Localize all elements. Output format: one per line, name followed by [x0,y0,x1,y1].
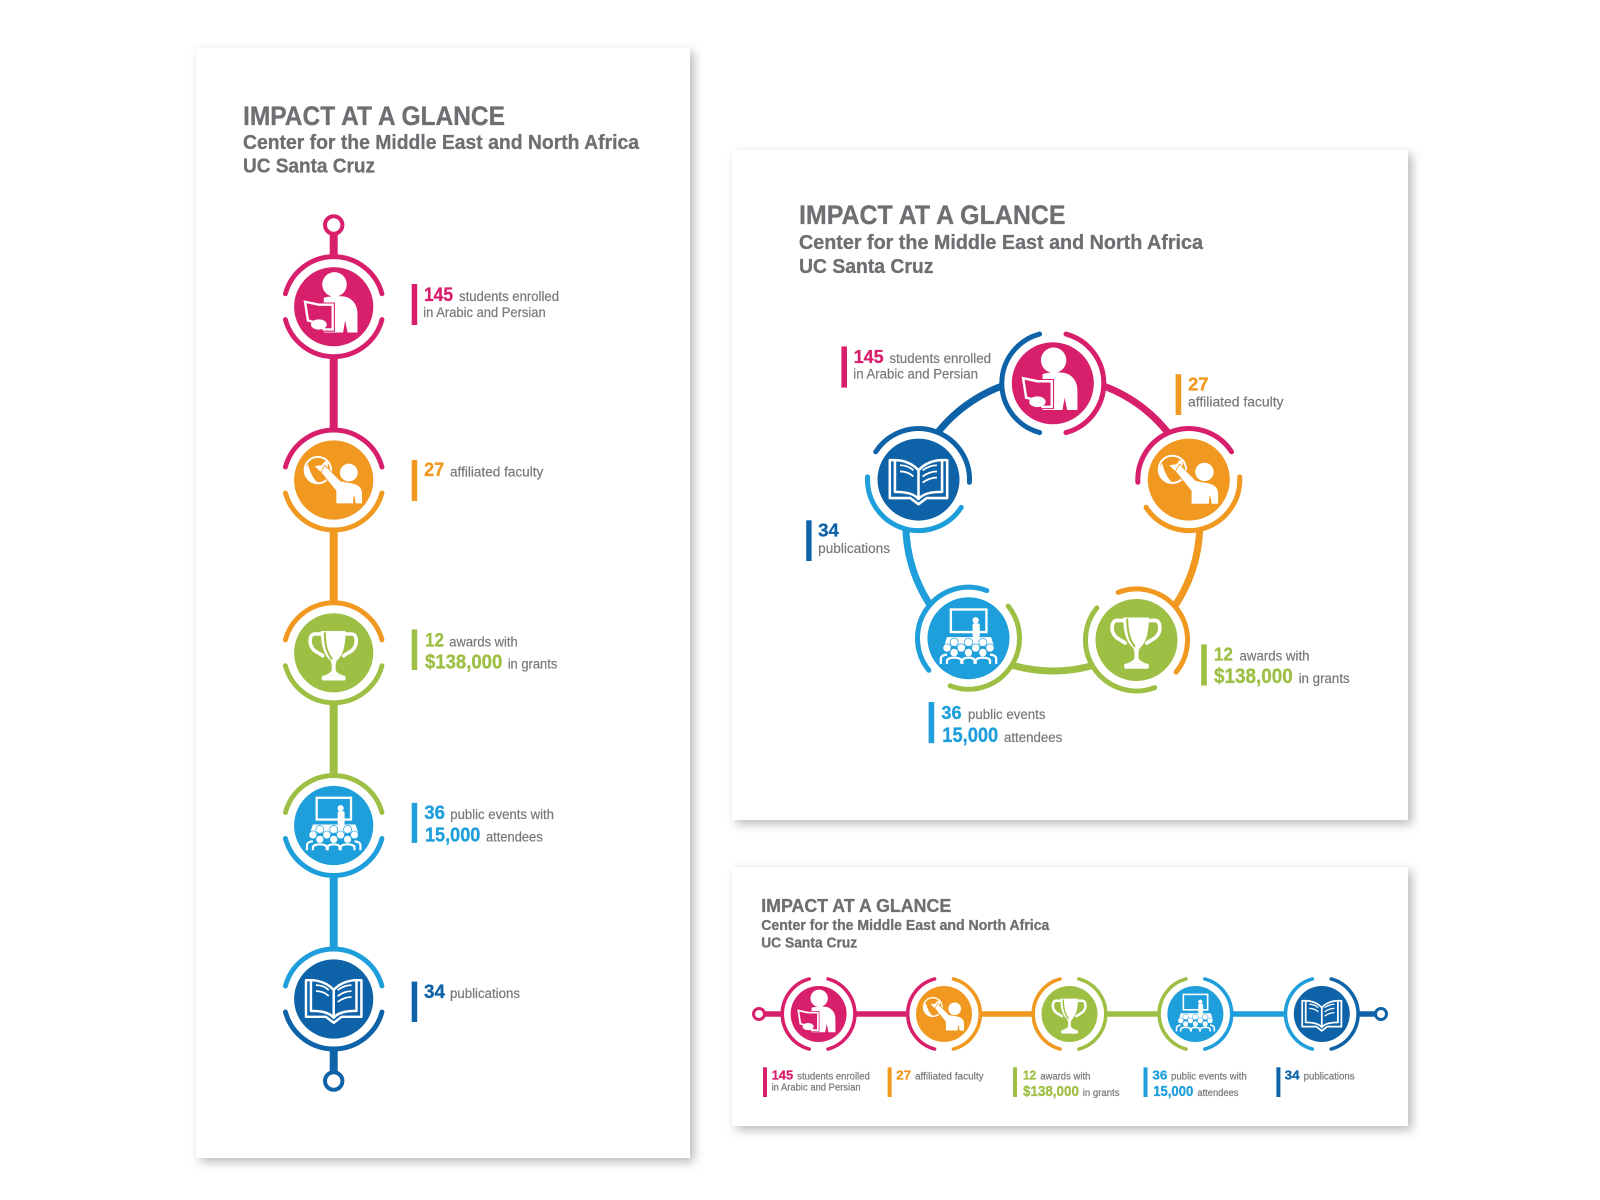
label: 145 students: students enrolled [459,289,559,304]
label: 145 students: students enrolled [889,351,991,366]
heading: horizontal panel: UC Santa Cruz [761,936,857,952]
panel: horizontal layout [732,867,1408,1126]
label: 36 events: 36 [941,703,962,723]
label: 36 events: attendees [1197,1088,1238,1099]
label: 27 faculty [888,1067,984,1097]
label: 34 publications: 34 [818,520,839,540]
label: 36 events: 36 [1152,1068,1167,1083]
label: 12 awards [1013,1067,1120,1100]
node: students [1002,332,1104,434]
label: 12 awards: 12 [1023,1068,1036,1083]
label: 36 events: 15,000 [425,825,480,847]
label: 36 events [412,802,554,847]
label: 34 publications: publications [1304,1072,1355,1083]
label: 12 awards: 12 [425,630,444,652]
heading: vertical panel [243,101,640,178]
connector ring: circular [906,377,1200,671]
heading: vertical panel: Center for the Middle East and North Africa [243,131,640,154]
label: 36 events: attendees [1004,730,1062,745]
node: events [1159,978,1232,1050]
node: students [284,257,384,357]
node: awards [284,603,384,703]
label: 34 publications [806,520,890,561]
label: 12 awards: awards with [1040,1072,1090,1083]
label: 34 publications: publications [818,541,890,556]
label: 145 students [841,346,991,388]
label: 12 awards: awards with [449,634,518,650]
label: 36 events: 15,000 [942,724,998,747]
heading: horizontal panel [761,896,1050,952]
label: 145 students: in Arabic and Persian [423,305,546,320]
node: publications [856,416,981,543]
label: 27 faculty: 27 [896,1068,911,1083]
node: publications [284,949,384,1049]
node: awards [1066,570,1207,710]
label: 36 events: attendees [486,830,543,845]
panel background: circular [732,150,1408,820]
label: 12 awards: $138,000 [1214,665,1293,688]
label: 145 students: 145 [854,347,884,367]
panel: vertical layout [196,48,690,1158]
connector chain: horizontal [754,1008,1386,1020]
label: 36 events [1144,1067,1247,1100]
label: 36 events: public events with [1171,1072,1247,1083]
label: 12 awards: in grants [1083,1088,1120,1099]
label: 27 faculty [412,459,544,501]
heading: circular panel: IMPACT AT A GLANCE [799,200,1066,230]
label: 36 events: public events [968,707,1046,722]
label: 27 faculty: 27 [1188,375,1209,395]
label: 12 awards: 12 [1214,644,1233,664]
label: 145 students: 145 [772,1068,793,1083]
heading: circular panel [799,200,1204,278]
label: 27 faculty: affiliated faculty [915,1072,984,1083]
heading: vertical panel: UC Santa Cruz [243,155,375,178]
node: events [898,568,1039,708]
label: 34 publications: publications [450,986,520,1001]
label: 12 awards: $138,000 [425,652,502,674]
node: faculty [908,978,980,1050]
heading: vertical panel: IMPACT AT A GLANCE [243,101,505,131]
node: publications [1285,978,1358,1050]
label: 36 events: 36 [424,802,445,824]
panel background: vertical [196,48,690,1158]
label: 34 publications [1276,1067,1355,1097]
label: 145 students [412,284,559,325]
label: 34 publications: 34 [424,981,445,1003]
node: students [782,978,855,1050]
label: 145 students: students enrolled [797,1072,870,1083]
label: 12 awards: awards with [1240,648,1310,663]
label: 27 faculty: affiliated faculty [1188,395,1284,410]
label: 145 students [763,1067,870,1097]
node: awards [1033,978,1106,1050]
label: 145 students: in Arabic and Persian [853,367,978,382]
node: events [284,776,384,876]
label: 27 faculty: 27 [424,459,444,481]
label: 27 faculty: affiliated faculty [450,464,544,480]
label: 12 awards [1201,644,1350,688]
label: 36 events: 15,000 [1153,1084,1193,1100]
heading: horizontal panel: Center for the Middle East and North Africa [761,918,1050,934]
panel: circular layout [732,150,1408,820]
label: 12 awards: in grants [1299,671,1350,686]
heading: circular panel: UC Santa Cruz [799,256,933,278]
node: faculty [1126,416,1251,543]
label: 145 students: 145 [424,284,453,306]
label: 12 awards [412,629,558,674]
label: 12 awards: $138,000 [1023,1084,1079,1100]
label: 34 publications: 34 [1285,1068,1300,1083]
connector chain: vertical [325,216,342,1090]
heading: circular panel: Center for the Middle East and North Africa [799,232,1204,254]
label: 12 awards: in grants [508,657,558,672]
heading: horizontal panel: IMPACT AT A GLANCE [761,896,951,916]
label: 27 faculty [1176,374,1284,415]
node: faculty [284,430,384,530]
panel background: horizontal [732,867,1408,1126]
label: 145 students: in Arabic and Persian [772,1083,861,1094]
label: 34 publications [412,981,520,1022]
label: 36 events [929,702,1062,747]
label: 36 events: public events with [450,807,554,822]
